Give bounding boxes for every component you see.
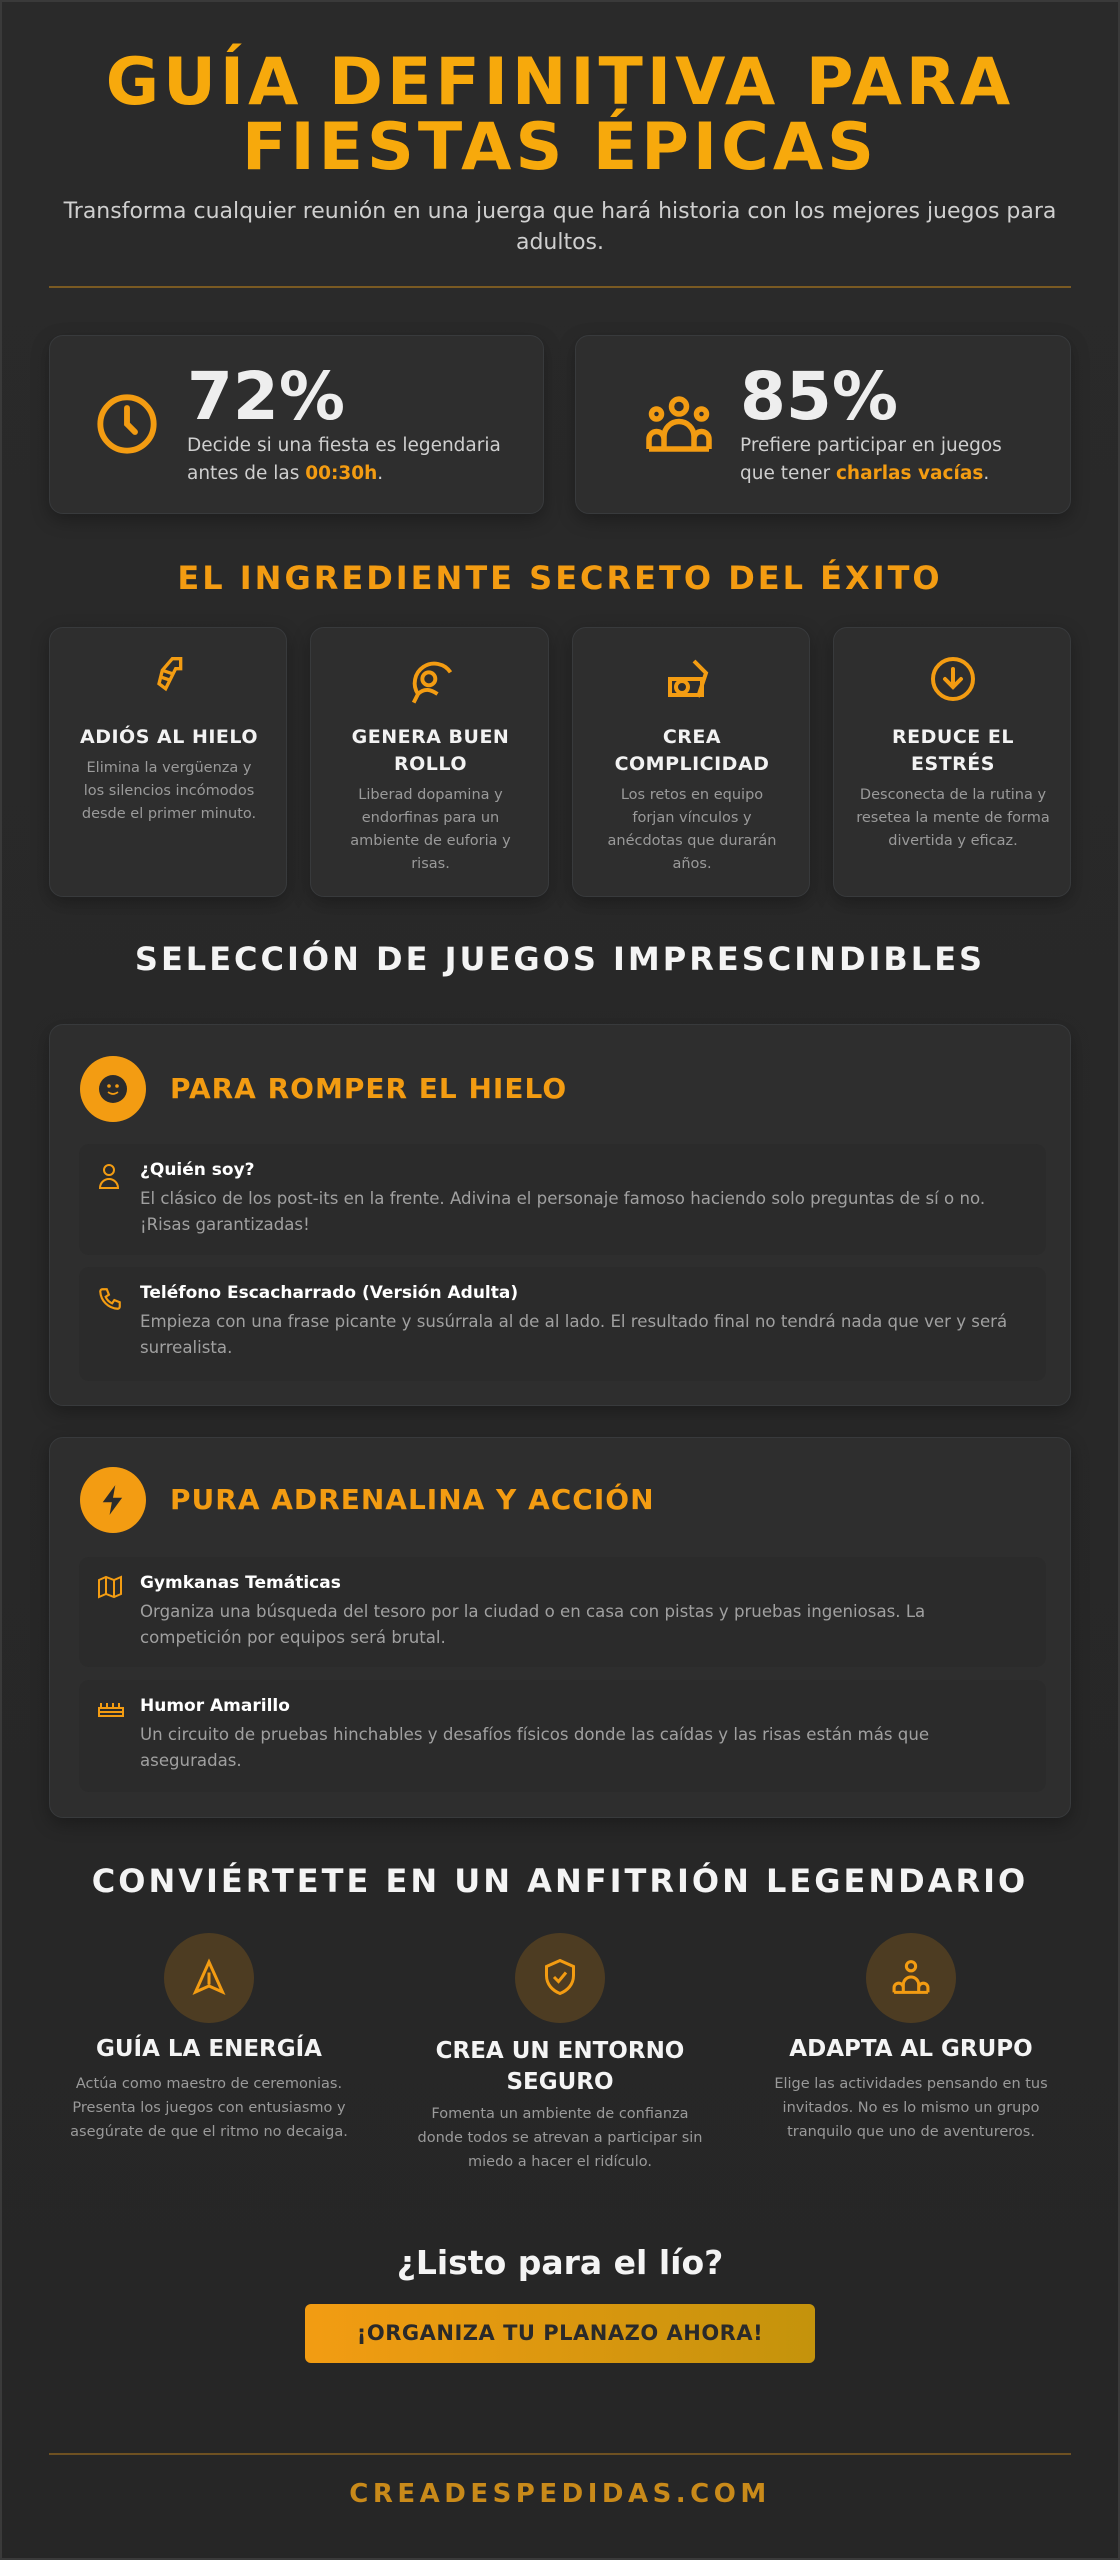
icon: bolt circle [80,1467,146,1533]
icon: shield [515,1933,605,2023]
icon: smile [412,662,452,704]
game: humor amarillo [79,1680,1046,1792]
panel: romper el hielo [49,1024,1071,1406]
tip: seguro: Fomenta un ambiente de confianza donde todos se atrevan a participar sin miedo a hacer el ridículo. [418,2106,702,2170]
benefit card 4 [833,627,1071,897]
benefit card 4: REDUCE EL [892,726,1014,748]
game: telefono: Teléfono Escacharrado (Versión Adulta) [140,1283,518,1303]
tip: energia: GUÍA LA ENERGÍA [96,2036,322,2062]
benefit card 1: Elimina la vergüenza y los silencios incómodos desde el primer minuto. [82,760,256,822]
benefit card 2: GENERA BUEN [352,726,509,748]
title [106,44,1014,185]
tip: grupo [774,1933,1048,2140]
stat card: 72% [49,335,544,514]
benefit card 1: ADIÓS AL HIELO [80,726,258,748]
icon: group [646,396,712,452]
heading: games selection: SELECCIÓN DE JUEGOS IMPRESCINDIBLES [135,940,985,978]
tip: seguro: SEGURO [506,2069,614,2095]
game: quien soy: ¿Quién soy? [140,1160,255,1180]
stat text: antes de las 00:30h. [187,463,383,484]
benefit card 3: COMPLICIDAD [615,753,769,775]
stat text [740,435,1002,484]
benefit card 3 [572,627,810,897]
game: quien soy: El clásico de los post-its en la frente. Adivina el personaje famoso haciendo solo preguntas de sí o no. ¡Risas garantizadas! [140,1189,985,1234]
stat number: 85% [740,358,898,435]
stat number: 72% [187,358,345,435]
heading: secret ingredient: EL INGREDIENTE SECRETO DEL ÉXITO [177,559,943,597]
benefit card 4: Desconecta de la rutina y resetea la mente de forma divertida y eficaz. [856,787,1050,849]
title: FIESTAS ÉPICAS [242,110,878,185]
game: quien soy [79,1144,1046,1255]
stat card: 85% [575,335,1071,514]
stat text: Prefiere participar en juegos [740,435,1002,456]
icon: smiley circle [80,1056,146,1122]
benefit card 1 [49,627,287,897]
icon: down arrow circle [931,657,975,701]
benefit card 4: ESTRÉS [911,753,995,775]
footer: CREADESPEDIDAS.COM [349,2479,771,2509]
tip: energia [70,1933,348,2140]
benefit card 2 [310,627,549,897]
icon: handshake [668,660,708,698]
game: humor amarillo: Un circuito de pruebas hinchables y desafíos físicos donde las caídas y las risas están más que aseguradas. [140,1725,929,1770]
game: gymkanas: Organiza una búsqueda del tesoro por la ciudad o en casa con pistas y pruebas ingeniosas. La competición por equipos será brutal. [140,1602,925,1647]
game: humor amarillo: Humor Amarillo [140,1696,290,1716]
benefit card 2: ROLLO [394,753,467,775]
stat text: Decide si una fiesta es legendaria [187,435,501,456]
benefit card 3: Los retos en equipo forjan vínculos y anécdotas que durarán años. [608,787,776,872]
tip: grupo: ADAPTA AL GRUPO [789,2036,1033,2062]
tip: energia: Actúa como maestro de ceremonias. Presenta los juegos con entusiasmo y asegúrate de que el ritmo no decaiga. [70,2076,348,2140]
subtitle: Transforma cualquier reunión en una juerga que hará historia con los mejores juegos para adultos. [64,199,1056,255]
cta button [305,2304,815,2363]
tip: seguro [418,1933,702,2170]
title: GUÍA DEFINITIVA PARA [106,45,1014,120]
game: telefono: Empieza con una frase picante y susúrrala al de al lado. El resultado final no tendrá nada que ver y será surrealista. [140,1312,1007,1357]
panel heading: PARA ROMPER EL HIELO [170,1072,567,1105]
benefit card 3: CREA [663,726,721,748]
cta button: ¡ORGANIZA TU PLANAZO AHORA! [357,2321,763,2345]
heading: host: CONVIÉRTETE EN UN ANFITRIÓN LEGENDARIO [92,1862,1028,1900]
tip: seguro: CREA UN ENTORNO [436,2038,684,2064]
stat text [187,435,501,484]
panel heading: PURA ADRENALINA Y ACCIÓN [170,1483,654,1516]
icon: ice [157,657,182,692]
icon: clock [97,394,157,454]
game: gymkanas [79,1557,1046,1667]
stat text: que tener charlas vacías. [740,463,989,484]
icon: triangle [164,1933,254,2023]
game: telefono [79,1267,1046,1381]
benefit card 2: Liberad dopamina y endorfinas para un ambiente de euforia y risas. [350,787,511,872]
cta heading: ¿Listo para el lío? [397,2243,723,2282]
game: gymkanas: Gymkanas Temáticas [140,1573,341,1593]
panel: adrenalina [49,1437,1071,1818]
tip: grupo: Elige las actividades pensando en tus invitados. No es lo mismo un grupo tranquilo que uno de aventureros. [774,2076,1048,2140]
icon: people [866,1933,956,2023]
